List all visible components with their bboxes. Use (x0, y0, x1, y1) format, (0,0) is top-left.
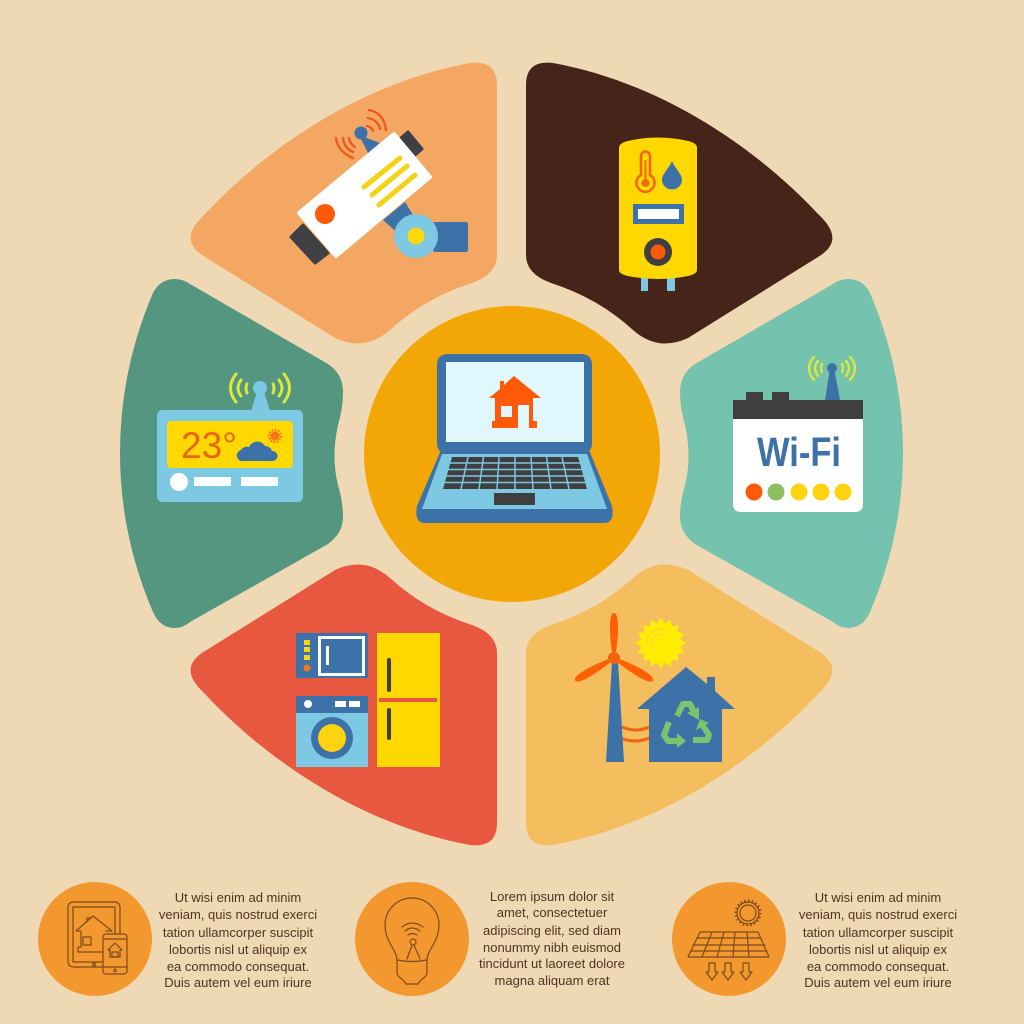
icon circle: smart bulb (355, 882, 469, 996)
icon: recycling house (637, 667, 735, 762)
icon: laptop (416, 354, 613, 523)
panel: thermostat (120, 279, 343, 628)
panel: center circle (364, 306, 660, 602)
text block (479, 889, 625, 988)
text block: tincidunt ut laoreet dolore (479, 956, 625, 971)
icon: refrigerator (377, 633, 440, 767)
feature: solar panel (672, 882, 957, 996)
icon circle: solar panel (672, 882, 786, 996)
panel: renewable energy (526, 565, 832, 845)
icon: cloud (237, 442, 278, 461)
icon circle: tablet and phone (38, 882, 152, 996)
icon: thermostat (157, 374, 303, 502)
text block: adipiscing elit, sed diam (483, 923, 621, 938)
panel: wi-fi router (680, 279, 903, 628)
icon: washing machine (296, 696, 368, 767)
text block: amet, consectetuer (497, 905, 608, 920)
feature: tablet and phone (38, 882, 317, 996)
temperature reading: 23° (181, 425, 237, 466)
icon: water drop (662, 161, 682, 190)
icon: house on screen (489, 376, 541, 428)
text block: magna aliquam erat (495, 973, 610, 988)
text block: lobortis nisl ut aliquip ex (169, 942, 308, 957)
feature: smart bulb (355, 882, 625, 996)
text block: ea commodo consequat. (167, 959, 309, 974)
panel: water heater (526, 63, 832, 343)
text block: Duis autem vel eum iriure (164, 975, 312, 990)
wi-fi label: Wi-Fi (757, 429, 841, 475)
panel: home appliances (191, 565, 497, 845)
text block: Ut wisi enim ad minim (175, 890, 301, 905)
text block (799, 890, 957, 990)
icon: microwave (296, 633, 368, 678)
icon: security camera (291, 110, 468, 263)
text block: ea commodo consequat. (807, 959, 949, 974)
icon: sun (269, 430, 281, 442)
icon: wind turbine (573, 613, 655, 762)
text block: Ut wisi enim ad minim (815, 890, 941, 905)
icon: water heater (619, 138, 697, 291)
text block: tation ullamcorper suscipit (803, 925, 954, 940)
text block: nonummy nibh euismod (483, 940, 621, 955)
panel: security camera (191, 63, 497, 343)
text block: Duis autem vel eum iriure (804, 975, 952, 990)
text block: Lorem ipsum dolor sit (490, 889, 615, 904)
text block: veniam, quis nostrud exerci (159, 907, 317, 922)
text block: veniam, quis nostrud exerci (799, 907, 957, 922)
icon: thermometer (636, 152, 654, 192)
icon: recycle arrows (664, 704, 709, 748)
text block (159, 890, 317, 990)
icon: wi-fi router (733, 357, 863, 512)
text block: tation ullamcorper suscipit (163, 925, 314, 940)
icon: sun (636, 618, 686, 668)
text block: lobortis nisl ut aliquip ex (809, 942, 948, 957)
